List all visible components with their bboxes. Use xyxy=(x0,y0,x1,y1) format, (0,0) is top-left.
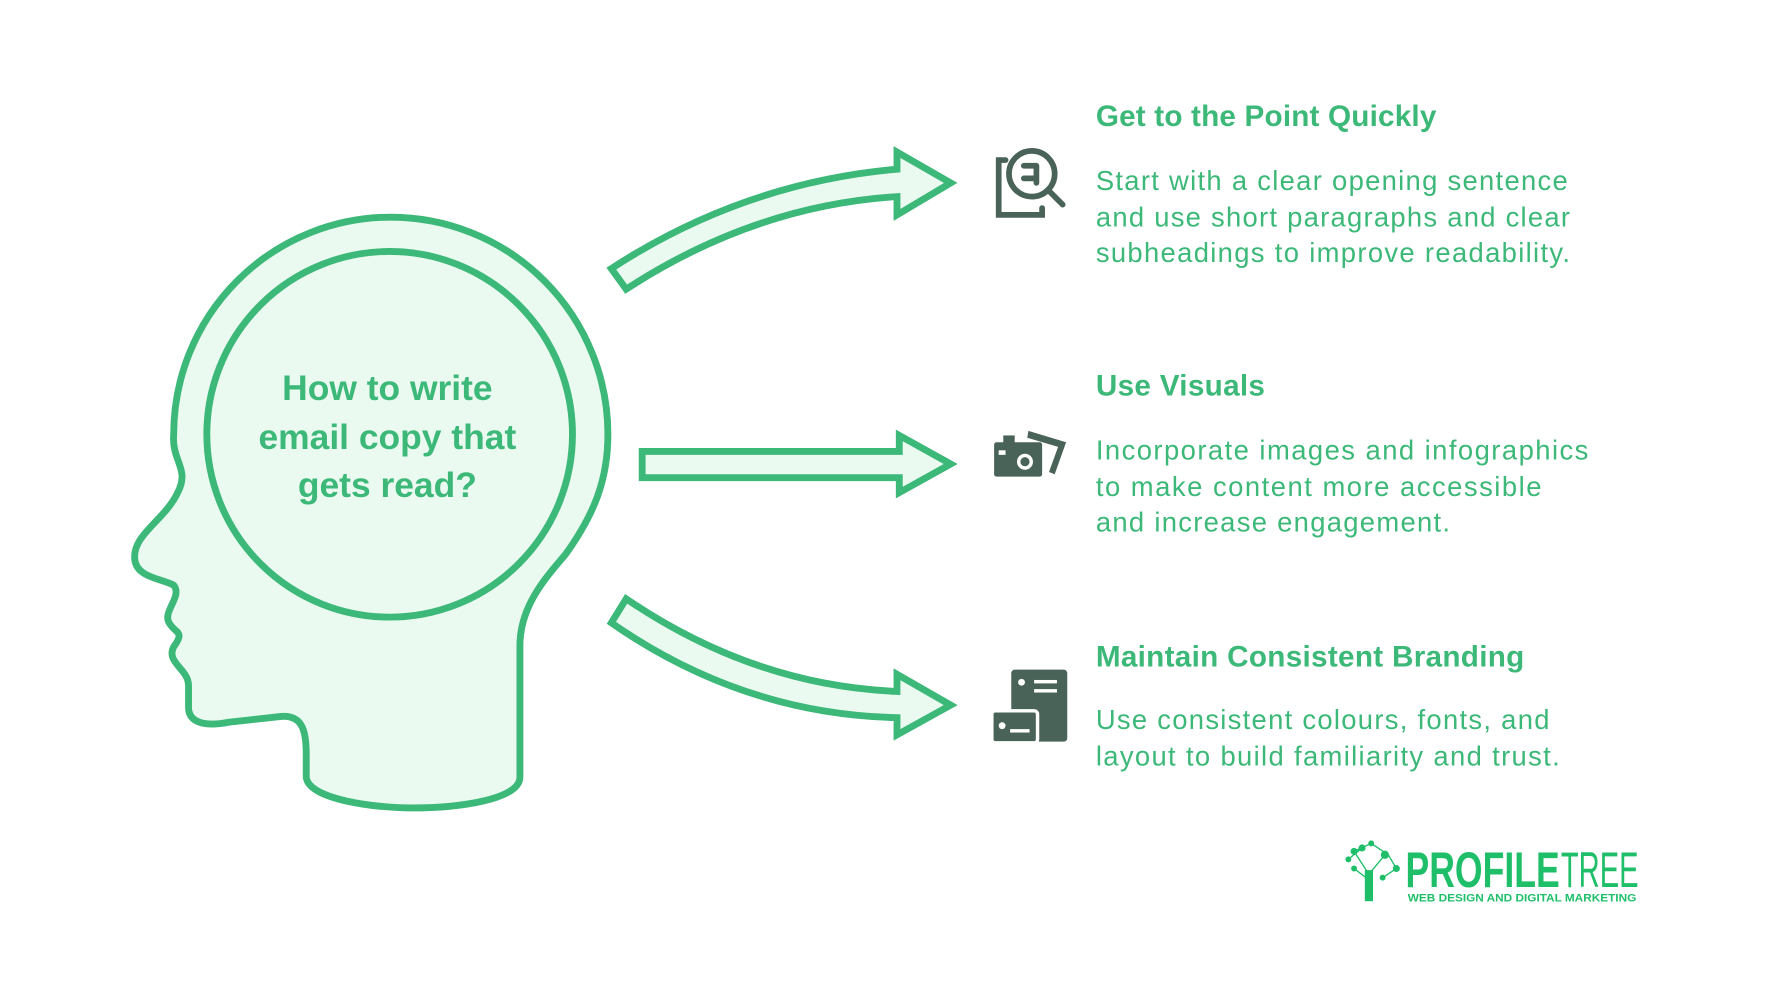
icon: search document xyxy=(999,151,1063,215)
text block: get to the point: Get to the Point Quickly xyxy=(1096,100,1437,133)
text block: consistent branding: Use consistent colours, fonts, and xyxy=(1096,704,1549,735)
text block: use visuals: Use Visuals xyxy=(1096,369,1265,402)
logo: profiletree xyxy=(1346,841,1639,905)
arrow: top xyxy=(611,152,951,289)
logo: profiletree: PROFILE xyxy=(1405,841,1560,898)
central question xyxy=(258,368,516,505)
text block: use visuals xyxy=(1096,369,1588,537)
text block: use visuals: and increase engagement. xyxy=(1096,506,1450,537)
arrow: bottom xyxy=(611,599,951,735)
central question: gets read? xyxy=(298,465,477,505)
arrow: middle xyxy=(642,435,951,493)
central question: email copy that xyxy=(258,417,516,457)
logo: profiletree: TREE xyxy=(1561,841,1639,898)
text block: get to the point: subheadings to improve readability. xyxy=(1096,237,1570,268)
logo: profiletree: WEB DESIGN AND DIGITAL MARKETING xyxy=(1408,893,1636,905)
inner circle xyxy=(207,251,572,617)
central question: How to write xyxy=(282,368,493,408)
icon: camera xyxy=(994,431,1066,477)
text block: use visuals: to make content more accessible xyxy=(1096,471,1541,502)
text block: use visuals: Incorporate images and infographics xyxy=(1096,434,1588,465)
text block: get to the point: and use short paragraphs and clear xyxy=(1096,201,1570,232)
head outline xyxy=(135,217,608,808)
text block: get to the point xyxy=(1096,100,1570,268)
text block: consistent branding xyxy=(1096,640,1560,772)
text block: consistent branding: Maintain Consistent Branding xyxy=(1096,640,1524,673)
icon: branding cards xyxy=(992,670,1067,743)
text block: consistent branding: layout to build familiarity and trust. xyxy=(1096,741,1560,772)
text block: get to the point: Start with a clear opening sentence xyxy=(1096,165,1568,196)
